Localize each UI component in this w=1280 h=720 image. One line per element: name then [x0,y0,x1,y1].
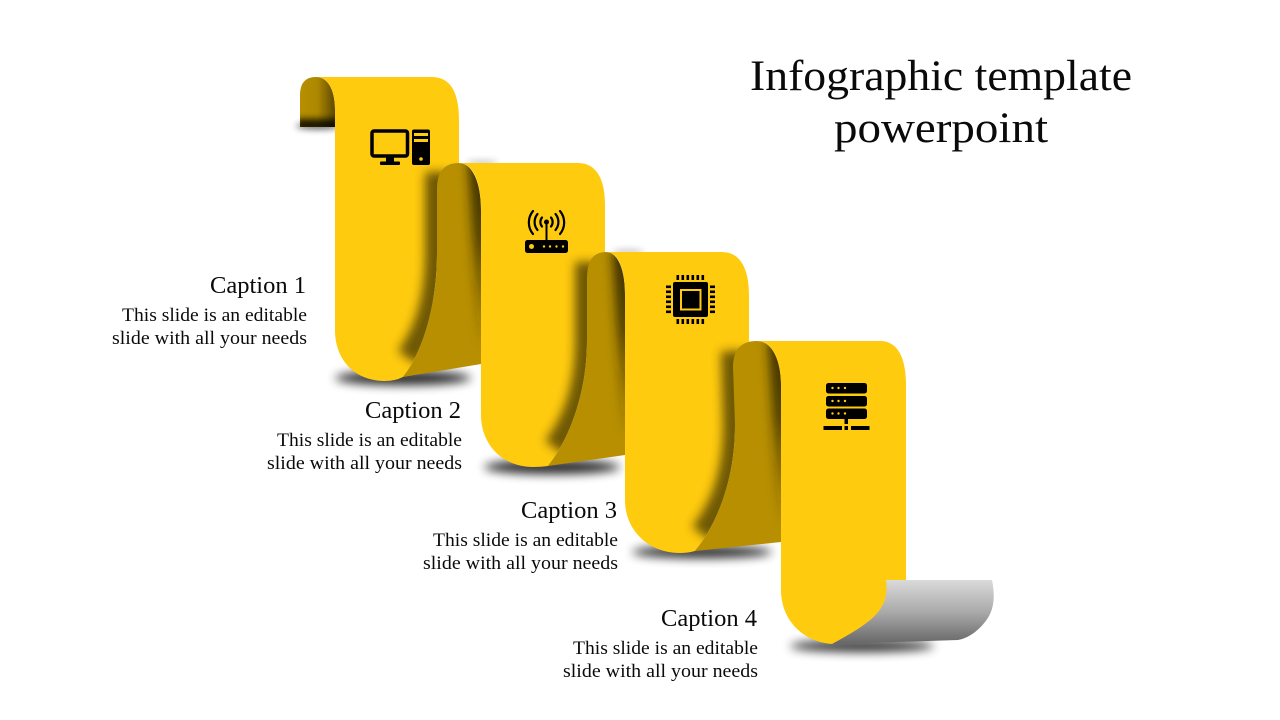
caption 3 [423,498,618,574]
caption 4: Caption 4 [661,606,757,632]
icon: processor chip [666,275,715,324]
caption 2 [267,398,462,474]
icon: desktop computer [372,130,430,165]
yellow face 1 [316,77,459,381]
icon: network server [824,383,870,430]
fold 3 [695,341,781,551]
panel: ribbon 4 [757,341,994,644]
cast shadow on face 2 [555,262,587,448]
caption 2: Caption 2 [365,398,461,424]
caption 4 [563,606,758,682]
floor shadows [296,123,934,652]
caption 1: This slide is an editable [122,305,307,326]
yellow face 2 [459,163,605,467]
caption 1 [112,273,307,349]
yellow face 3 [606,252,749,553]
fold 1 [403,163,481,377]
grey end curl [832,580,994,644]
fold 2 [548,252,625,466]
caption 4: This slide is an editable [573,638,758,659]
caption 2: slide with all your needs [267,453,462,474]
caption 3: This slide is an editable [433,530,618,551]
icon: wifi router [525,211,568,253]
panel: ribbon 1 [296,77,496,381]
title: Infographic template [750,53,1132,100]
caption 3: slide with all your needs [423,553,618,574]
title [750,53,1132,152]
caption 4: slide with all your needs [563,661,758,682]
caption 3: Caption 3 [521,498,617,524]
caption 1: Caption 1 [210,273,306,299]
panel: ribbon 3 [606,252,796,553]
title: powerpoint [834,105,1048,152]
yellow face 4 [757,341,906,644]
cast shadow on face 3 [702,351,735,534]
caption 1: slide with all your needs [112,328,307,349]
caption 2: This slide is an editable [277,430,462,451]
panel: ribbon 2 [459,163,640,467]
top curl [300,77,335,127]
cast shadow on face 1 [408,172,437,358]
